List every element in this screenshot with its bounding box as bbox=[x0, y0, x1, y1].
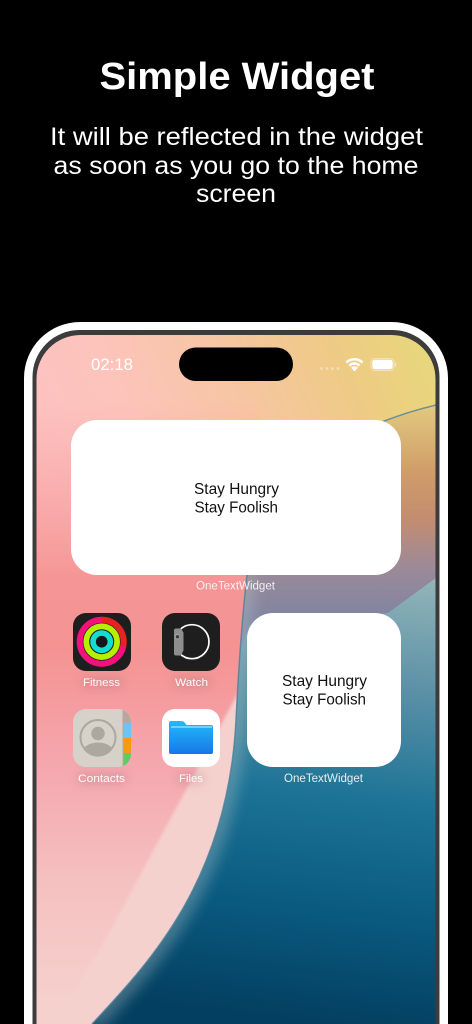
icon: battery bbox=[371, 358, 396, 370]
small widget bbox=[247, 613, 401, 767]
label shadows bbox=[78, 677, 210, 784]
icon: watch bbox=[162, 613, 220, 671]
fitness label: Fitness bbox=[83, 677, 121, 689]
phone white frame bbox=[24, 322, 448, 1024]
subtitle text: screen bbox=[196, 180, 276, 208]
files label: Files bbox=[179, 773, 204, 785]
large widget label: OneTextWidget bbox=[196, 580, 276, 592]
large widget text: Stay Hungry bbox=[194, 481, 279, 498]
icon: wifi bbox=[346, 359, 362, 370]
icon: contacts bbox=[73, 709, 132, 767]
small widget label: OneTextWidget bbox=[284, 773, 364, 785]
dynamic island bbox=[179, 348, 293, 381]
small widget text: Stay Hungry bbox=[282, 673, 367, 690]
signal dots bbox=[320, 367, 340, 370]
contacts label: Contacts bbox=[78, 773, 126, 785]
small widget text: Stay Foolish bbox=[282, 692, 366, 708]
subtitle text: It will be reflected in the widget bbox=[50, 123, 423, 151]
icon: files bbox=[162, 709, 220, 767]
icon: fitness bbox=[73, 613, 131, 671]
subtitle text: as soon as you go to the home bbox=[54, 152, 418, 180]
phone dark bezel bbox=[32, 330, 440, 1024]
large widget text: Stay Foolish bbox=[194, 500, 278, 516]
title: Simple Widget bbox=[100, 56, 375, 98]
status bar time: 02:18 bbox=[91, 356, 133, 374]
large widget bbox=[71, 420, 401, 575]
wallpaper bbox=[30, 330, 442, 1024]
subtitle text bbox=[50, 123, 423, 208]
watch label: Watch bbox=[175, 677, 208, 689]
phone mockup bbox=[24, 322, 448, 1024]
